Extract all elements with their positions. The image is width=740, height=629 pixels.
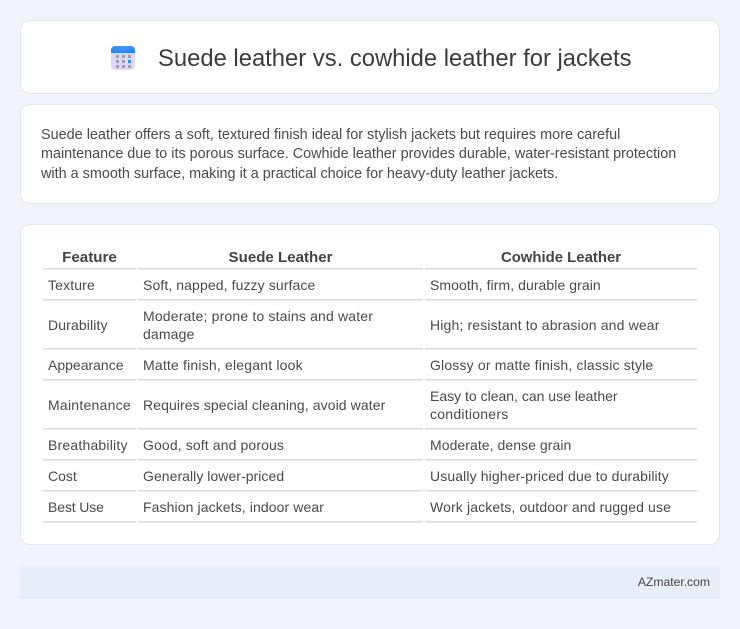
row: durability: damage xyxy=(143,326,194,342)
row: cost: Usually higher-priced due to durability xyxy=(430,468,669,484)
footer text: AZmater.com xyxy=(638,575,710,589)
row: best use xyxy=(48,499,671,515)
row: maintenance xyxy=(48,388,618,422)
row: texture: Texture xyxy=(48,277,95,293)
row: breathability xyxy=(48,437,571,453)
text block: intro: Suede leather offers a soft, textured finish ideal for stylish jackets but requires more careful xyxy=(41,127,620,143)
table header xyxy=(62,249,621,266)
icon: calendar xyxy=(111,46,135,70)
title: Suede leather vs. cowhide leather for jackets xyxy=(158,45,632,72)
text block: intro xyxy=(41,127,676,182)
panel: intro text xyxy=(20,104,720,204)
row: maintenance: Maintenance xyxy=(48,397,131,413)
row: maintenance: Easy to clean, can use leather xyxy=(430,388,618,404)
row: appearance: Matte finish, elegant look xyxy=(143,357,303,373)
row: appearance: Glossy or matte finish, classic style xyxy=(430,357,653,373)
text block: intro: maintenance due to its porous surface. Cowhide leather provides durable, water-resistant protection xyxy=(41,146,676,162)
row: texture: Soft, napped, fuzzy surface xyxy=(143,277,315,293)
row: durability xyxy=(48,308,660,342)
table header: Feature xyxy=(62,249,117,266)
text block: intro: with a smooth surface, making it a practical choice for heavy-duty leather jackets. xyxy=(41,166,558,182)
row: best use: Work jackets, outdoor and rugged use xyxy=(430,499,671,515)
row: breathability: Good, soft and porous xyxy=(143,437,284,453)
table xyxy=(43,249,697,523)
row: maintenance: conditioners xyxy=(430,406,508,422)
table header: Cowhide Leather xyxy=(501,249,621,266)
footer bar xyxy=(20,566,720,599)
row: texture: Smooth, firm, durable grain xyxy=(430,277,601,293)
row: maintenance: Requires special cleaning, avoid water xyxy=(143,397,385,413)
table header: Suede Leather xyxy=(229,249,332,266)
row: best use: Best Use xyxy=(48,499,104,515)
row: appearance xyxy=(48,357,653,373)
row: appearance: Appearance xyxy=(48,357,124,373)
row: cost: Generally lower-priced xyxy=(143,468,284,484)
row: breathability: Breathability xyxy=(48,437,128,453)
row: cost xyxy=(48,468,669,484)
row: durability: Moderate; prone to stains and water xyxy=(143,308,373,324)
row: cost: Cost xyxy=(48,468,77,484)
row: breathability: Moderate, dense grain xyxy=(430,437,571,453)
row: texture xyxy=(48,277,601,293)
row: durability: High; resistant to abrasion and wear xyxy=(430,317,660,333)
row: durability: Durability xyxy=(48,317,108,333)
panel: comparison table xyxy=(20,224,720,545)
row: best use: Fashion jackets, indoor wear xyxy=(143,499,324,515)
panel: title card xyxy=(20,20,720,94)
